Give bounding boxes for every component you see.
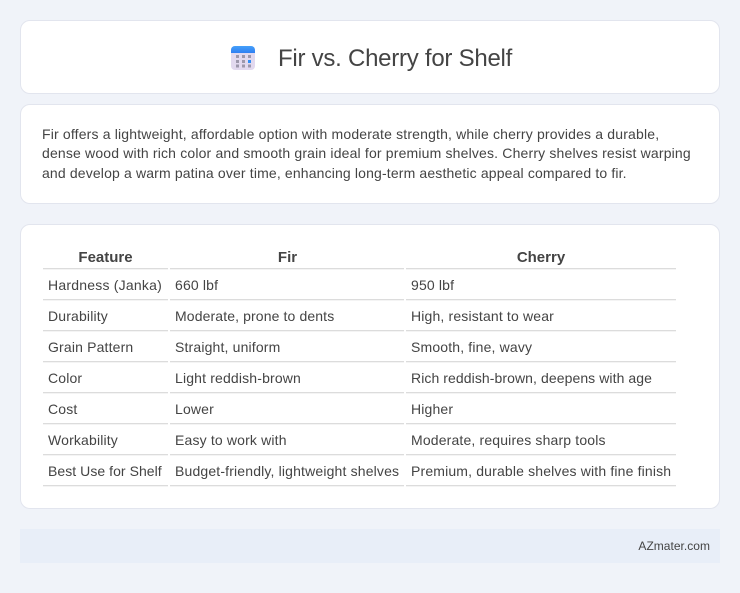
table header: Cherry [517,249,565,266]
table rows: Higher [411,401,453,417]
footer brand: AZmater.com [638,539,710,553]
table rows: Cost [48,401,77,417]
table rows: 660 lbf [175,277,218,293]
table rows: Budget-friendly, lightweight shelves [175,463,399,479]
table rows: Easy to work with [175,432,287,448]
header card [20,20,720,94]
table rows: Light reddish-brown [175,370,301,386]
title: Fir vs. Cherry for Shelf [278,45,512,72]
table rows: Moderate, prone to dents [175,308,334,324]
intro text panel [20,104,720,204]
intro line 1: Fir offers a lightweight, affordable option with moderate strength, while cherry provides a durable, [42,126,659,142]
table rows: Premium, durable shelves with fine finish [411,463,671,479]
table rows: Smooth, fine, wavy [411,339,532,355]
table rows: Lower [175,401,214,417]
table header: Fir [278,249,297,266]
icon: calendar [231,46,255,70]
intro line 3: and develop a warm patina over time, enhancing long-term aesthetic appeal compared to fir. [42,165,627,181]
table rows: Durability [48,308,108,324]
table rows: 950 lbf [411,277,454,293]
table rows: Color [48,370,82,386]
table rows: Grain Pattern [48,339,133,355]
table rows: Best Use for Shelf [48,463,162,479]
table rows: High, resistant to wear [411,308,554,324]
footer bar [20,529,720,563]
intro line 2: dense wood with rich color and smooth grain ideal for premium shelves. Cherry shelves resist warping [42,145,691,161]
table rows: Workability [48,432,118,448]
comparison table panel [20,224,720,509]
table header: Feature [78,249,133,266]
table header [78,249,566,266]
table rows: Straight, uniform [175,339,280,355]
table rows: Moderate, requires sharp tools [411,432,606,448]
table rows [43,268,676,486]
table rows: Hardness (Janka) [48,277,162,293]
table rows: Rich reddish-brown, deepens with age [411,370,652,386]
